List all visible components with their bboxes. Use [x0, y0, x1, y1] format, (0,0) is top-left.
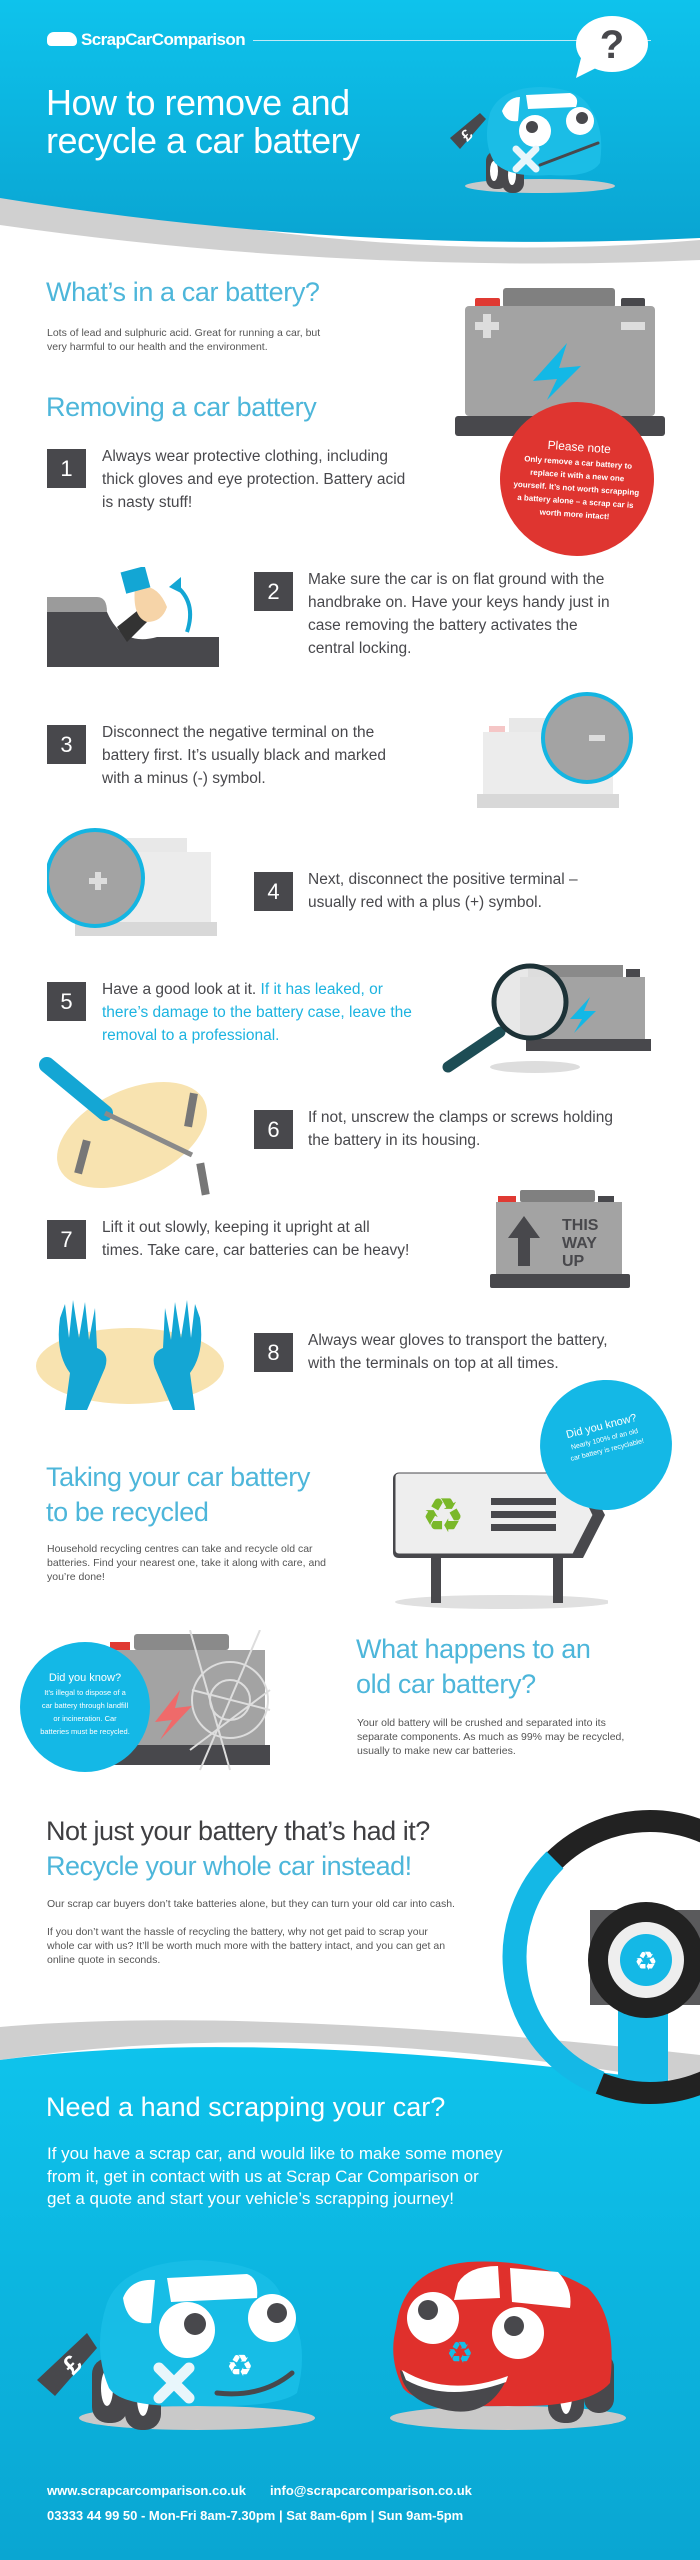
callout: please note: a battery alone – a scrap car is — [517, 493, 634, 510]
step 8: Always wear gloves to transport the battery, — [308, 1332, 608, 1349]
step 3: with a minus (-) symbol. — [102, 770, 266, 787]
step 6: 6 — [267, 1117, 280, 1142]
icon: red car — [390, 2262, 626, 2430]
callout: please note: Please note — [547, 438, 611, 456]
icon: this way up battery: WAY — [562, 1235, 597, 1252]
text: cta paragraph: from it, get in contact with us at Scrap Car Comparison or — [47, 2166, 479, 2186]
step 8: 8 — [267, 1340, 280, 1365]
icon: sad blue car: £ — [458, 127, 477, 145]
header background — [0, 0, 700, 264]
step 5 — [47, 981, 412, 1044]
step 1: 1 — [60, 456, 73, 481]
step 4: Next, disconnect the positive terminal – — [308, 871, 578, 888]
icon: big battery — [455, 288, 665, 436]
icon: gloves — [36, 1300, 224, 1410]
text: recycling centres: you’re done! — [47, 1571, 105, 1583]
text: what happens: Your old battery will be crushed and separated into its — [357, 1717, 606, 1729]
step 6: the battery in its housing. — [308, 1132, 480, 1149]
footer contact: 03333 44 99 50 - Mon-Fri 8am-7.30pm | Sat 8am-6pm | Sun 9am-5pm — [47, 2508, 463, 2523]
callout: please note: Only remove a car battery to — [524, 454, 632, 471]
text: scrap car buyers: online quote in seconds. — [47, 1954, 160, 1966]
step 7 — [47, 1219, 409, 1259]
icon: this way up battery: UP — [562, 1253, 585, 1270]
step 3: battery first. It’s usually black and marked — [102, 747, 386, 764]
callout: did you know 100%: car battery is recyclable! — [570, 1438, 645, 1463]
icon: sad blue car — [450, 87, 615, 193]
callout: please note: yourself. It’s not worth scrapping — [513, 480, 639, 497]
text: battery contents: very harmful to our health and the environment. — [47, 341, 268, 353]
text: scrap car buyers: whole car with us? It’ll be worth much more with the battery intact, and you can get an — [47, 1940, 445, 1952]
step 1: Always wear protective clothing, including — [102, 448, 388, 465]
step 2: handbrake on. Have your keys handy just in — [308, 594, 610, 611]
heading: what happens: old car battery? — [356, 1669, 536, 1699]
callout: please note: worth more intact! — [539, 507, 610, 521]
heading: not just your battery: Not just your battery that’s had it? — [46, 1816, 430, 1846]
text: battery contents: Lots of lead and sulphuric acid. Great for running a car, but — [47, 327, 320, 339]
heading: taking your car battery: Taking your car battery — [46, 1462, 310, 1492]
text: cta paragraph: If you have a scrap car, and would like to make some money — [47, 2144, 502, 2163]
text: scrap car buyers — [47, 1898, 455, 1966]
step 4: usually red with a plus (+) symbol. — [308, 894, 542, 911]
step 5: Have a good look at it. If it has leaked, or — [102, 981, 383, 998]
icon: recycling sign: ♻ — [421, 1488, 465, 1544]
step 4 — [254, 871, 578, 911]
text: what happens: usually to make new car batteries. — [357, 1745, 516, 1757]
footer contact: www.scrapcarcomparison.co.uk info@scrapcarcomparison.co.uk — [47, 2483, 472, 2498]
callout: did you know 100%: Did you know? — [565, 1412, 638, 1441]
step 2 — [254, 571, 610, 657]
heading: what's in a car battery: What’s in a car battery? — [46, 277, 320, 307]
heading: removing a car battery: Removing a car battery — [46, 392, 316, 422]
step 2: 2 — [267, 579, 280, 604]
callout: did you know illegal: Did you know? — [49, 1672, 121, 1684]
icon: blue car: £ — [56, 2348, 88, 2380]
text: battery contents — [47, 327, 320, 353]
step 6: If not, unscrew the clamps or screws holding — [308, 1109, 613, 1126]
bottom background — [0, 2020, 700, 2560]
icon: question bubble — [576, 16, 648, 78]
text: recycling centres: Household recycling centres can take and recycle old car — [47, 1543, 313, 1555]
heading: need a hand: Need a hand scrapping your car? — [46, 2092, 445, 2122]
title — [46, 82, 360, 161]
step 8 — [254, 1332, 608, 1372]
callout: did you know illegal: or incineration. Car — [53, 1714, 117, 1723]
text: recycling centres — [47, 1543, 326, 1583]
callout: did you know illegal — [20, 1642, 150, 1772]
text: cta paragraph — [47, 2144, 502, 2208]
text: cta paragraph: get a quote and start your vehicle’s scrapping journey! — [47, 2189, 454, 2208]
step 2: central locking. — [308, 640, 411, 657]
icon: battery negative terminal — [477, 692, 633, 808]
callout: did you know illegal: It’s illegal to dispose of a — [44, 1688, 126, 1697]
icon: this way up battery — [490, 1190, 630, 1288]
step 7: Lift it out slowly, keeping it upright at all — [102, 1219, 370, 1236]
step 3: Disconnect the negative terminal on the — [102, 724, 374, 741]
footer contact — [47, 2483, 472, 2523]
icon: magnifier on battery — [442, 964, 651, 1073]
step 1: thick gloves and eye protection. Battery acid — [102, 471, 405, 488]
step 2: Make sure the car is on flat ground with the — [308, 571, 604, 588]
icon: blue car — [37, 2260, 315, 2430]
step 2: case removing the battery activates the — [308, 617, 578, 634]
title: recycle a car battery — [46, 120, 360, 161]
callout: did you know 100%: Nearly 100% of an old — [570, 1428, 639, 1451]
step 6 — [254, 1109, 613, 1149]
text: scrap car buyers: Our scrap car buyers don’t take batteries alone, but they can turn your old car into cash. — [47, 1898, 455, 1910]
text: what happens: separate components. As much as 99% may be recycled, — [357, 1731, 624, 1743]
step 7: 7 — [60, 1227, 73, 1252]
step 5: there’s damage to the battery case, leave the — [102, 1004, 412, 1021]
step 4: 4 — [267, 879, 280, 904]
icon: red car: ♻ — [447, 2336, 473, 2371]
callout: please note: replace it with a new one — [530, 468, 625, 483]
heading: not just your battery — [46, 1816, 430, 1881]
icon: cobweb battery — [110, 1630, 270, 1770]
logo: ScrapCarComparison — [81, 30, 245, 49]
callout: please note — [495, 397, 659, 561]
step 5: 5 — [60, 989, 73, 1014]
callout: did you know illegal: batteries must be recycled. — [40, 1727, 130, 1736]
step 1 — [47, 448, 405, 511]
callout: did you know illegal: car battery through landfill — [42, 1701, 128, 1710]
step 7: times. Take care, car batteries can be heavy! — [102, 1242, 409, 1259]
step 3: 3 — [60, 732, 73, 757]
text: scrap car buyers: If you don’t want the hassle of recycling the battery, why not get paid to scrap your — [47, 1926, 428, 1938]
icon: handbrake — [47, 567, 219, 667]
icon: battery positive terminal — [47, 828, 217, 936]
heading: taking your car battery: to be recycled — [46, 1497, 208, 1527]
text: what happens — [357, 1717, 624, 1757]
icon: steering wheel: ♻ — [634, 1947, 658, 1977]
icon: steering wheel — [502, 1810, 700, 2104]
step 5: removal to a professional. — [102, 1027, 279, 1044]
title: How to remove and — [46, 82, 350, 123]
icon: screwdriver and screws — [39, 1057, 210, 1196]
text: recycling centres: batteries. Find your nearest one, take it along with care, and — [47, 1557, 326, 1569]
step 3 — [47, 724, 386, 787]
icon: question bubble: ? — [600, 23, 624, 67]
heading: what happens — [356, 1634, 590, 1699]
callout: did you know 100% — [526, 1366, 686, 1524]
step 1: is nasty stuff! — [102, 494, 192, 511]
step 8: with the terminals on top at all times. — [308, 1355, 559, 1372]
heading: taking your car battery — [46, 1462, 310, 1527]
heading: what happens: What happens to an — [356, 1634, 590, 1664]
heading: not just your battery: Recycle your whole car instead! — [46, 1851, 412, 1881]
icon: blue car: ♻ — [227, 2349, 253, 2384]
icon: recycling sign — [393, 1472, 608, 1609]
icon: this way up battery: THIS — [562, 1217, 599, 1234]
